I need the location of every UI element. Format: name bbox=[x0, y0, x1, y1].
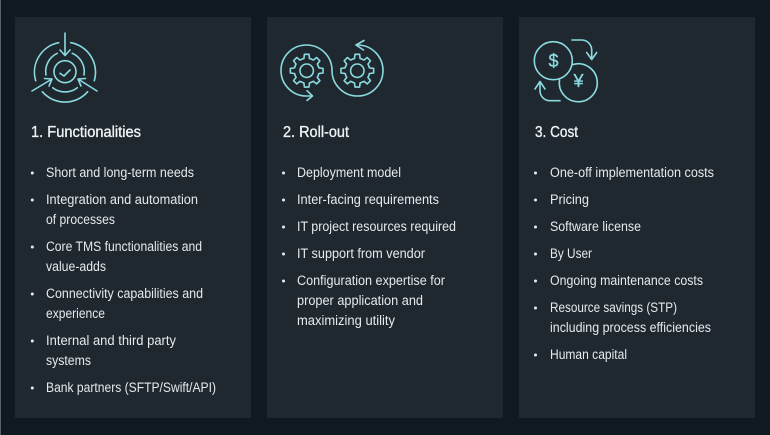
list: roll-out items: IT project resources required bbox=[297, 219, 456, 234]
icon: currency exchange: $ bbox=[548, 51, 559, 71]
list: roll-out items: proper application and bbox=[297, 293, 423, 308]
list: functionalities items: Short and long-term needs bbox=[46, 165, 194, 180]
list: roll-out items: Inter-facing requirements bbox=[297, 192, 439, 207]
list: cost items: Software license bbox=[550, 219, 641, 234]
heading: 2. Roll-out: 2. Roll-out bbox=[283, 124, 350, 141]
list: roll-out items bbox=[282, 165, 456, 328]
list: functionalities items: Core TMS functionalities and bbox=[46, 239, 202, 254]
list: cost items: Resource savings (STP) bbox=[550, 300, 677, 315]
panel: cost bbox=[519, 17, 755, 418]
list: functionalities items: experience bbox=[46, 306, 105, 321]
list: roll-out items: IT support from vendor bbox=[297, 246, 425, 261]
icon: currency exchange: ¥ bbox=[572, 71, 584, 91]
list: cost items: By User bbox=[550, 246, 592, 261]
list: roll-out items: Configuration expertise for bbox=[297, 273, 445, 288]
list: roll-out items: Deployment model bbox=[297, 165, 401, 180]
list: cost items: Ongoing maintenance costs bbox=[550, 273, 703, 288]
list: cost items: Pricing bbox=[550, 192, 589, 207]
list: cost items: Human capital bbox=[550, 347, 627, 362]
list: functionalities items: value-adds bbox=[46, 259, 106, 274]
heading: 3. Cost: 3. Cost bbox=[535, 124, 579, 141]
icon: currency exchange bbox=[534, 40, 597, 102]
panel: functionalities bbox=[15, 17, 251, 418]
list: cost items: One-off implementation costs bbox=[550, 165, 714, 180]
list: roll-out items: maximizing utility bbox=[297, 313, 395, 328]
list: cost items: including process efficiencies bbox=[550, 320, 711, 335]
list: functionalities items: systems bbox=[46, 353, 91, 368]
list: functionalities items: Bank partners (SFTP/Swift/API) bbox=[46, 380, 216, 395]
list: functionalities items: Connectivity capabilities and bbox=[46, 286, 203, 301]
icon: gears with looping arrow bbox=[281, 40, 383, 100]
list: functionalities items: Integration and automation bbox=[46, 192, 198, 207]
list: functionalities items bbox=[31, 165, 216, 395]
list: cost items bbox=[534, 165, 714, 362]
panel: roll-out bbox=[267, 17, 503, 418]
list: functionalities items: of processes bbox=[46, 212, 115, 227]
icon: target with inward arrows bbox=[32, 33, 97, 102]
list: functionalities items: Internal and third party bbox=[46, 333, 176, 348]
heading: 1. Functionalities: 1. Functionalities bbox=[31, 124, 141, 141]
